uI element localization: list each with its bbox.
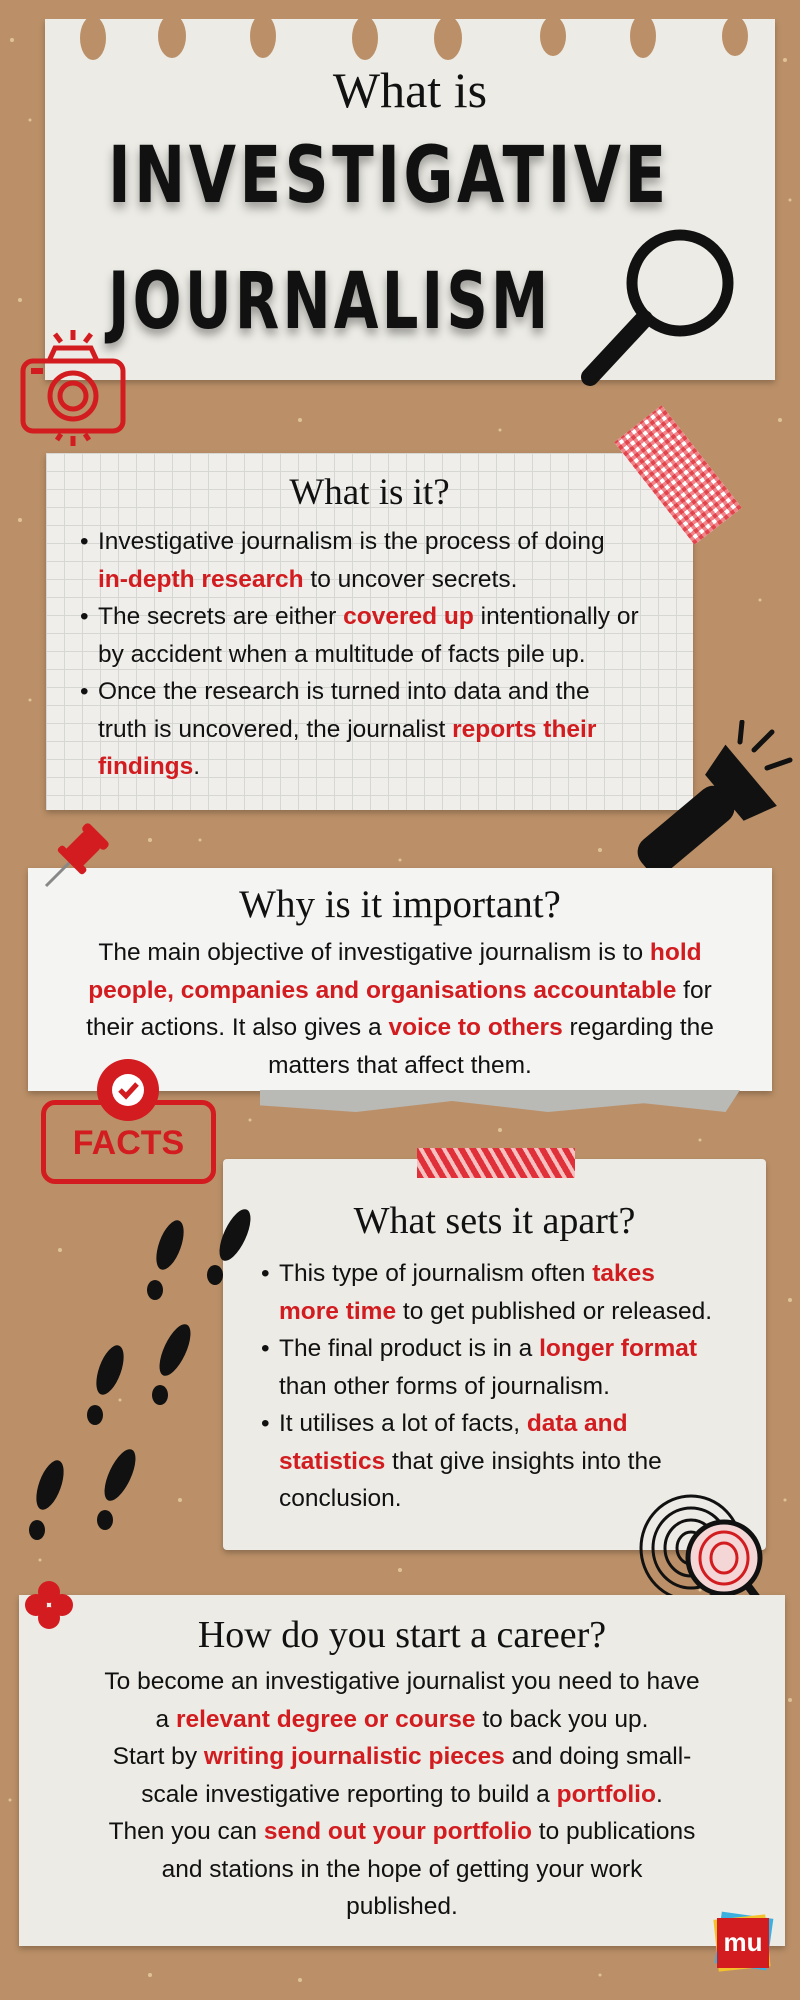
heading: Why is it important?: Why is it important?: [239, 883, 561, 926]
bullets: what is it: [81, 528, 639, 780]
bullets: what is it: Once the research is turned into data and the: [98, 678, 590, 705]
title: JOURNALISM: JOURNALISM: [108, 257, 552, 347]
text: career: scale investigative reporting to build a portfolio.: [141, 1780, 663, 1808]
torn holes: [80, 6, 748, 60]
tape: red zigzag: [417, 1148, 575, 1178]
bullets: what is it: by accident when a multitude of facts pile up.: [98, 640, 586, 668]
panel: why is it important: [28, 868, 772, 1091]
text: career: Then you can send out your portfolio to publications: [109, 1818, 695, 1845]
logo: mu: mu: [724, 1927, 762, 1957]
logo: mu: [713, 1912, 774, 1972]
icon: footprints: [29, 1209, 250, 1540]
heading: How do you start a career?: How do you start a career?: [198, 1614, 606, 1656]
bullets: apart: statistics that give insights into the: [279, 1448, 662, 1474]
text: career: Start by writing journalistic pieces and doing small-: [113, 1743, 691, 1770]
title: INVESTIGATIVE: INVESTIGATIVE: [108, 131, 670, 221]
icon: flashlight: [638, 720, 792, 868]
bullets: what is it: The secrets are either covered up intentionally or: [98, 603, 639, 630]
text: career: published.: [346, 1893, 458, 1920]
text: career: a relevant degree or course to back you up.: [156, 1706, 648, 1732]
icon: check circle: [97, 1059, 159, 1121]
icon: pushpin: [45, 823, 109, 887]
torn strip: [260, 1090, 740, 1112]
heading: What is it?: What is it?: [289, 472, 450, 513]
badge: FACTS: [41, 1059, 216, 1184]
bullets: what is it: in-depth research to uncover secrets.: [98, 566, 517, 592]
heading: What sets it apart?: What sets it apart?: [354, 1200, 635, 1242]
text: importance: matters that affect them.: [268, 1052, 532, 1078]
bullets: apart: The final product is in a longer format: [279, 1335, 697, 1362]
panel: career: [19, 1595, 785, 1946]
text: career: To become an investigative journalist you need to have: [104, 1668, 700, 1695]
bullets: apart: It utilises a lot of facts, data and: [279, 1410, 628, 1437]
icon: red flower: [25, 1581, 73, 1629]
bullets: apart: [262, 1260, 712, 1512]
bullets: apart: more time to get published or released.: [279, 1298, 712, 1324]
tape: pink: [614, 405, 742, 545]
title: What is: What is: [333, 62, 487, 118]
panel: title: [45, 19, 775, 380]
text: importance: The main objective of investigative journalism is to hold: [98, 939, 702, 966]
panel: what is it: [46, 453, 693, 810]
bullets: what is it: truth is uncovered, the journalist reports their: [98, 716, 596, 742]
icon: camera: [20, 330, 126, 446]
icon: fingerprint magnifier: [640, 1494, 762, 1595]
icon: magnifier: [581, 230, 734, 386]
bullets: apart: This type of journalism often takes: [279, 1260, 655, 1287]
text: importance: people, companies and organisations accountable for: [88, 976, 712, 1004]
text: importance: their actions. It also gives a voice to others regarding the: [86, 1014, 714, 1041]
text: importance: [86, 939, 714, 1078]
bullets: apart: than other forms of journalism.: [279, 1372, 610, 1400]
badge: FACTS: FACTS: [73, 1124, 184, 1162]
bullets: what is it: findings.: [98, 753, 200, 780]
bullets: what is it: Investigative journalism is the process of doing: [98, 528, 605, 555]
text: career: and stations in the hope of getting your work: [162, 1856, 642, 1882]
panel: what sets it apart: [223, 1159, 766, 1550]
text: career: [104, 1668, 700, 1920]
bullets: apart: conclusion.: [279, 1485, 402, 1512]
